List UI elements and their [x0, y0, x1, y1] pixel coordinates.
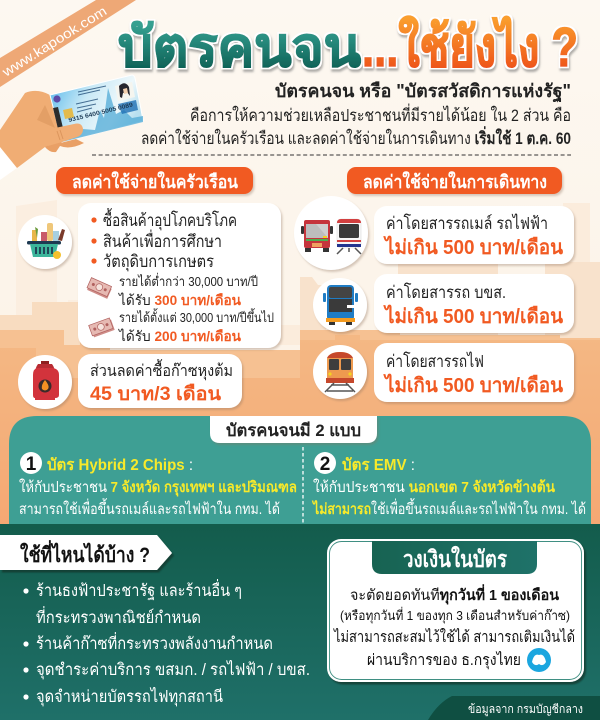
panel: bus and skytrain fare: ไม่เกิน 500 บาท/เดือน	[383, 235, 563, 259]
source credit: ข้อมูลจาก กรมบัญชีกลาง	[468, 702, 583, 717]
heading: where to use	[0, 535, 172, 570]
panel: train fare	[374, 343, 574, 402]
ribbon: website: www.kapook.com	[0, 3, 109, 80]
heading tab	[372, 541, 537, 574]
heading pill: travel: ลดค่าใช้จ่ายในการเดินทาง	[363, 171, 547, 192]
heading tab: บัตรคนจนมี 2 แบบ	[226, 420, 361, 440]
list: where to use: จุดจำหน่ายบัตรรถไฟทุกสถานี	[36, 687, 223, 707]
divider	[92, 154, 571, 156]
panel: household items: ได้รับ 200 บาท/เดือน	[118, 328, 241, 344]
list: where to use: ร้านธงฟ้าประชารัฐ และร้านอื่น ๆ	[36, 579, 242, 600]
panel: gas discount: ส่วนลดค่าซื้อก๊าซหุงต้ม	[90, 359, 233, 381]
intro text	[141, 81, 571, 148]
heading tab: วงเงินในบัตร	[403, 545, 508, 572]
card type 1: บัตร Hybrid 2 Chips :	[47, 456, 193, 474]
heading pill: travel	[347, 167, 562, 194]
id card: 9315 6400 5005 0089	[68, 102, 134, 124]
icon: city bus and skytrain	[294, 196, 368, 270]
panel: household items: วัตถุดิบการเกษตร	[103, 252, 214, 272]
icon: train	[313, 345, 367, 399]
icon: Krungthai bank logo	[527, 648, 551, 672]
panel: card credit: ผ่านบริการของ ธ.กรุงไทย	[367, 651, 521, 670]
icon: shopping basket	[18, 215, 72, 269]
panel: household items: รายได้ต่ำกว่า 30,000 บาท/ปี	[119, 273, 258, 289]
card type 1: ให้กับประชาชน 7 จังหวัด กรุงเทพฯ และปริมณฑล	[19, 478, 297, 497]
card type 2: 2	[320, 454, 330, 475]
heading tab	[210, 416, 377, 443]
list: where to use: จุดชำระค่าบริการ ขสมก. / รถไฟฟ้า / บขส.	[36, 660, 310, 680]
panel: bus and skytrain fare: ค่าโดยสารรถเมล์ รถไฟฟ้า	[386, 213, 548, 233]
list: where to use: ร้านค้าก๊าซที่กระทรวงพลังงานกำหนด	[36, 632, 273, 653]
card type 2	[311, 452, 586, 518]
icon: banknotes 1	[86, 278, 112, 299]
card type 1: สามารถใช้เพื่อขึ้นรถเมล์และรถไฟฟ้าใน กทม. ได้	[19, 498, 280, 518]
intro text: ลดค่าใช้จ่ายในครัวเรือน และลดค่าใช้จ่ายในการเดินทาง เริ่มใช้ 1 ต.ค. 60	[141, 126, 571, 148]
panel: household items: รายได้ตั้งแต่ 30,000 บาท/ปีขึ้นไป	[119, 308, 274, 325]
panel: BKS bus fare: ค่าโดยสารรถ บขส.	[386, 282, 506, 302]
panel: card credit: จะตัดยอดทันทีทุกวันที่ 1 ของเดือน	[350, 584, 560, 605]
intro text: บัตรคนจน หรือ "บัตรสวัสดิการแห่งรัฐ"	[275, 81, 571, 103]
icon: banknotes 2	[89, 318, 115, 338]
icon: hand holding card	[0, 75, 143, 180]
panel: gas discount	[78, 354, 242, 408]
panel: household items: ซื้อสินค้าอุปโภคบริโภค	[103, 208, 237, 231]
icon: gas cylinder	[18, 355, 72, 409]
list: where to use	[23, 579, 310, 707]
panel: household items: สินค้าเพื่อการศึกษา	[103, 229, 222, 251]
panel: household items	[78, 203, 281, 348]
panel: bus and skytrain fare	[374, 206, 574, 264]
ribbon: website	[0, 0, 136, 87]
card type 1: 1	[26, 454, 37, 475]
panel: two card types	[9, 416, 591, 526]
panel: card credit: (หรือทุกวันที่ 1 ของทุก 3 เดือนสำหรับค่าก๊าซ)	[340, 607, 570, 624]
city skyline background	[0, 200, 600, 525]
heading: where to use: ใช้ที่ไหนได้บ้าง ?	[20, 539, 150, 567]
panel: dark footer section	[0, 524, 600, 720]
list: where to use: ที่กระทรวงพาณิชย์กำหนด	[36, 606, 201, 627]
panel: train fare: ไม่เกิน 500 บาท/เดือน	[383, 373, 563, 397]
card type 2: ให้กับประชาชน นอกเขต 7 จังหวัดข้างต้น	[313, 478, 556, 496]
id card	[50, 75, 143, 142]
heading pill: household	[56, 167, 253, 194]
icon: long-distance bus	[313, 278, 367, 332]
panel: BKS bus fare: ไม่เกิน 500 บาท/เดือน	[383, 304, 563, 328]
panel: train fare: ค่าโดยสารรถไฟ	[386, 351, 484, 371]
panel: BKS bus fare	[374, 274, 574, 333]
card type 1	[19, 452, 297, 518]
title	[118, 15, 578, 78]
panel: card credit	[327, 539, 584, 682]
panel: household items: ได้รับ 300 บาท/เดือน	[118, 292, 241, 308]
title: บัตรคนจน	[118, 16, 361, 78]
heading pill: household: ลดค่าใช้จ่ายในครัวเรือน	[72, 171, 239, 192]
panel: gas discount: 45 บาท/3 เดือน	[90, 383, 221, 405]
card type 2: บัตร EMV :	[342, 456, 415, 474]
source credit	[428, 696, 600, 720]
